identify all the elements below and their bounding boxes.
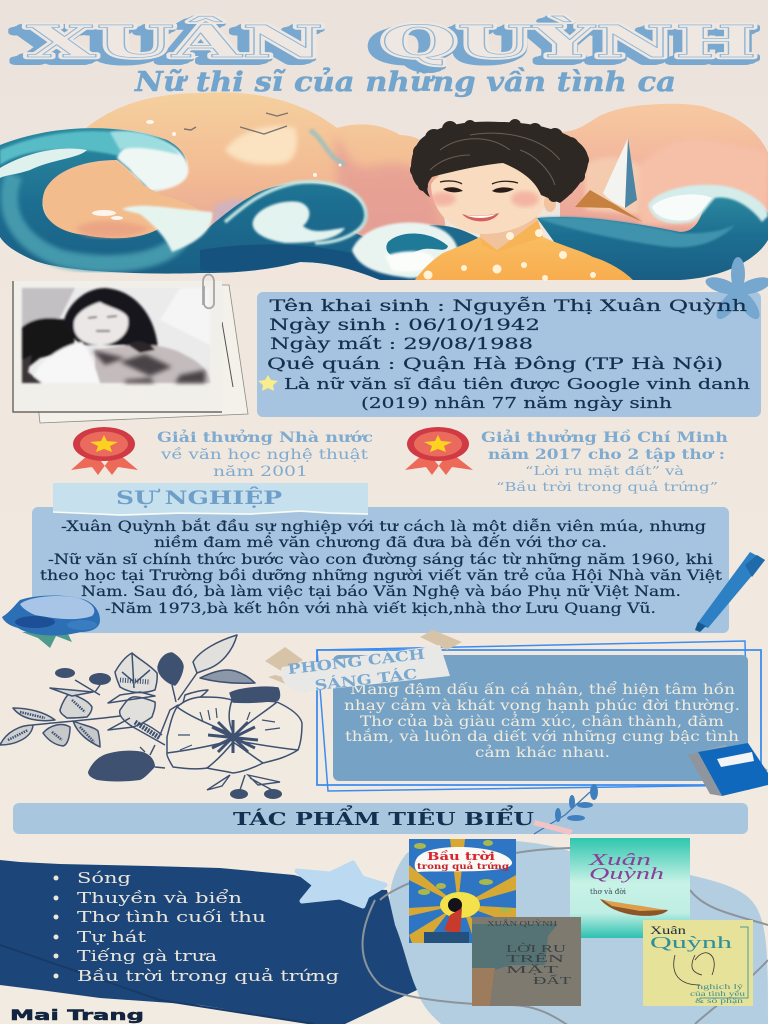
book cover: Bầu trời trong quả trứng: Bầu trời [427, 849, 496, 863]
heading: notable works [13, 803, 748, 834]
boat [575, 190, 643, 222]
book cover: Thơ và đời: thơ và đời [590, 887, 627, 896]
award text left: về văn học nghệ thuật [160, 447, 369, 463]
panel: writing style: cảm khác nhau. [475, 745, 610, 761]
face [431, 163, 547, 234]
big flower outline [167, 697, 302, 773]
top leaf [115, 653, 157, 693]
wave middle rim [225, 182, 366, 243]
wave right [537, 193, 768, 280]
book cover: Nghịch lý của tình yêu và số phận: Quỳnh [650, 933, 733, 952]
award text right [481, 430, 728, 494]
book cover: Nghịch lý của tình yêu và số phận [643, 920, 753, 1006]
dress [415, 237, 633, 280]
title: XUÂN [14, 20, 314, 73]
dark berry top [230, 687, 280, 702]
author name: Mai Trang [10, 1008, 144, 1024]
top right leaves [193, 635, 237, 673]
title: XUÂN [18, 19, 318, 72]
line art flowers [0, 635, 302, 773]
flower stamens [208, 720, 258, 753]
wave big left and body [0, 128, 450, 280]
polaroid photo [13, 281, 248, 423]
white streak [0, 149, 87, 178]
book cover: Lời ru trên mặt đất: LỜI RU [506, 943, 566, 955]
title: QUỲNH [374, 19, 754, 72]
heading: writing style note [265, 630, 462, 697]
heading: career banner [53, 483, 368, 516]
award text left: Giải thưởng Nhà nước [157, 430, 373, 446]
bud [158, 653, 183, 685]
personal info text [267, 296, 750, 412]
icon: blue pen [695, 552, 765, 632]
heading: notable works: TÁC PHẨM TIÊU BIỂU [233, 803, 534, 830]
clouds right [560, 104, 768, 240]
neck [480, 205, 538, 250]
list of works: Sóng [77, 869, 132, 887]
panel: career: niềm đam mê văn chương đã đưa bà đến với thơ ca. [154, 535, 607, 551]
title: QUỲNH [378, 17, 758, 70]
grey scribble line [362, 848, 768, 1024]
wave middle foam [253, 201, 345, 243]
left branch leaves [13, 708, 55, 721]
front paper [13, 281, 222, 412]
panel: career: -Xuân Quỳnh bắt đầu sự nghiệp với tư cách là một diễn viên múa, nhưng [61, 519, 706, 535]
heading: career banner: SỰ NGHIỆP [116, 486, 282, 509]
title: QUỲNH [370, 20, 750, 73]
hair [410, 119, 589, 203]
wave lower navy [200, 245, 410, 280]
icon: award ribbon left [71, 427, 138, 475]
personal info text: Tên khai sinh : Nguyễn Thị Xuân Quỳnh [270, 296, 747, 315]
panel: writing style [333, 655, 748, 781]
book cover: Bầu trời trong quả trứng [409, 839, 516, 943]
wave top light band [0, 131, 172, 172]
book cover: Lời ru trên mặt đất [472, 917, 581, 1006]
hero illustration [0, 92, 768, 281]
wave behind woman [420, 225, 490, 280]
panel: career [32, 507, 729, 633]
panel: personal info [257, 292, 761, 417]
book cover: Nghịch lý của tình yêu và số phận: nghịch lý [697, 983, 744, 991]
heading: writing style note: PHONG CÁCH [287, 645, 426, 678]
book cover: Thơ và đời [570, 838, 690, 938]
title: XUÂN [22, 17, 322, 70]
title: XUÂN [26, 15, 324, 68]
panel: career: theo học tại Trường bồi dưỡng những người viết văn trẻ của Hội Nhà văn Việt [40, 568, 723, 584]
book cover: Thơ và đời: Xuân [587, 850, 651, 869]
wave right foam [648, 185, 768, 223]
line art berries [55, 668, 282, 799]
subtitle: Nữ thi sĩ của những vần tình ca [134, 66, 676, 98]
frames around style panel [317, 641, 761, 791]
clouds left [30, 92, 450, 260]
list of works: Tiếng gà trưa [77, 947, 217, 965]
award text right: “Lời ru mặt đất” và [525, 463, 684, 478]
panel: writing style: nhạy cảm và khát vọng hạnh phúc đời thường. [344, 698, 740, 714]
book cover: Nghịch lý của tình yêu và số phận: của tình yêu [690, 990, 746, 998]
panel: writing style: thắm, và luôn da diết với những cung bậc tình [345, 729, 739, 745]
wave side light band [9, 175, 180, 264]
book cover: Nghịch lý của tình yêu và số phận: Xuân [650, 923, 686, 937]
panel: career: -Năm 1973,bà kết hôn với nhà viết kịch,nhà thơ Lưu Quang Vũ. [105, 601, 656, 617]
list of works: Tự hát [77, 928, 146, 946]
collar [480, 220, 543, 252]
light blue blob [389, 840, 768, 1024]
portrait [22, 288, 210, 383]
award text right: “Bầu trời trong quả trứng” [496, 479, 718, 494]
decorative blue flower top right [704, 257, 768, 323]
title: XUÂN [26, 15, 324, 68]
list of works: Bầu trời trong quả trứng [77, 967, 340, 985]
birds [184, 113, 288, 134]
book cover: Nghịch lý của tình yêu và số phận: & số phận [695, 997, 744, 1005]
personal info text: Ngày mất : 29/08/1988 [270, 334, 533, 353]
title [14, 15, 758, 73]
award text left [157, 430, 373, 480]
book cover: Lời ru trên mặt đất: MẶT [506, 964, 559, 976]
icon: blue book [688, 743, 768, 796]
panel: career: Nam. Sau đó, bà làm việc tại báo Văn Nghệ và báo Phụ nữ Việt Nam. [81, 584, 681, 600]
book cover: Lời ru trên mặt đất: ĐẤT [533, 974, 571, 987]
center small flower [120, 697, 155, 727]
personal info text: Là nữ văn sĩ đầu tiên được Google vinh danh [284, 375, 750, 393]
book cover: Bầu trời trong quả trứng: trong quả trứng [417, 861, 510, 871]
panel: writing style: Mang đậm dấu ấn cá nhân, thể hiện tâm hồn [350, 682, 735, 698]
panel: torn navy paper [0, 860, 417, 1024]
panel: career: -Nữ văn sĩ chính thức bước vào con đường sáng tác từ những năm 1960, khi [48, 552, 714, 568]
icon: blue rose [2, 596, 100, 648]
book cover: Lời ru trên mặt đất: XUÂN QUỲNH [487, 920, 557, 928]
award text left: năm 2001 [213, 464, 308, 480]
personal info text: (2019) nhân 77 năm ngày sinh [361, 394, 672, 412]
list of works [54, 869, 340, 985]
icon: award ribbon right [405, 427, 473, 475]
icon: yellow star [258, 375, 278, 391]
wave 3 ball [352, 222, 458, 278]
panel: writing style: Thơ của bà giàu cảm xúc, chân thành, đằm [360, 714, 724, 730]
icon: leaf branch with tape [533, 784, 598, 835]
heading: writing style note: SÁNG TÁC [314, 665, 418, 694]
icon: puffy star [297, 863, 385, 906]
list of works: Thơ tình cuối thu [77, 908, 266, 926]
personal info text: Quê quán : Quận Hà Đông (TP Hà Nội) [267, 354, 723, 373]
award text right: Giải thưởng Hồ Chí Minh [481, 430, 728, 446]
book cover: Lời ru trên mặt đất: TRÊN [506, 953, 564, 965]
title: QUỲNH [381, 15, 757, 68]
list of works: Thuyền và biển [77, 889, 242, 907]
icon: paper clip [203, 274, 214, 308]
back paper [38, 285, 248, 423]
title: QUỲNH [381, 15, 757, 68]
peach inner [43, 163, 205, 238]
award text right: năm 2017 cho 2 tập thơ : [488, 447, 725, 463]
lower foam [122, 206, 212, 252]
personal info text: Ngày sinh : 06/10/1942 [269, 315, 540, 334]
crest foam [117, 139, 188, 192]
book cover: Thơ và đời: Quỳnh [589, 864, 664, 883]
